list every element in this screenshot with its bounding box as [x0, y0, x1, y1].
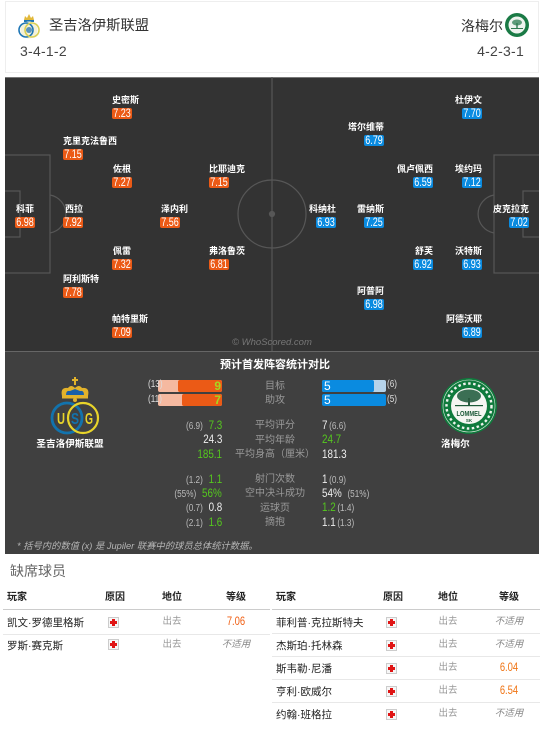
home assists bar	[158, 394, 222, 406]
player: 佩卢佩西	[397, 164, 433, 189]
row: 罗斯·赛克斯: 罗斯·赛克斯	[7, 640, 63, 652]
player: 雷纳斯: 7.25	[365, 215, 383, 229]
player: 西拉: 西拉	[65, 204, 83, 214]
label: goals: 目标	[265, 381, 285, 392]
label: tackles: 摘抱	[265, 517, 285, 528]
player: 西拉: 7.92	[64, 215, 82, 229]
icon: away team crest	[505, 13, 529, 37]
icon: USG crest: S	[71, 411, 79, 428]
row: 亨利·欧威尔	[272, 680, 540, 703]
away assists season value: (5)	[387, 394, 397, 405]
player: 佐根: 7.27	[113, 175, 131, 189]
away team name: 洛梅尔	[461, 18, 503, 34]
player: 克里克法鲁西	[63, 136, 117, 161]
home height: 185.1	[197, 447, 222, 461]
row: 菲利普·克拉斯特夫: 菲利普·克拉斯特夫	[276, 617, 364, 629]
player: 皮克拉克: 7.02	[510, 215, 528, 229]
player: 皮克拉克	[493, 204, 529, 229]
player: 佩卢佩西: 6.59	[414, 175, 432, 189]
player: 埃约玛: 7.12	[463, 175, 481, 189]
table header: 原因	[383, 592, 403, 603]
label: shots: 射门次数	[255, 474, 295, 485]
away assists bar	[322, 394, 386, 406]
pitch markings	[5, 77, 539, 351]
row: 斯韦勒·尼潘: 斯韦勒·尼潘	[276, 663, 332, 675]
label: average rating: 平均评分	[255, 420, 295, 431]
row: 亨利·欧威尔: 6.54	[500, 685, 518, 697]
table header: 地位	[162, 592, 182, 603]
player: 阿利斯特: 7.78	[64, 285, 82, 299]
player: 杜伊文	[455, 94, 482, 120]
panel: lineup statistics comparison	[5, 351, 539, 554]
icon: USG crest: U	[57, 411, 65, 428]
player: 杜伊文: 杜伊文	[455, 95, 482, 105]
player: 雷纳斯	[357, 204, 384, 229]
table header: 地位	[438, 592, 458, 603]
away goals season value: (6)	[387, 379, 397, 390]
player: 西拉	[63, 204, 83, 229]
away goals bar: 5	[324, 379, 331, 393]
row: 凯文·罗德里格斯	[3, 610, 270, 635]
home tackles: (2.1) 1.6	[186, 515, 222, 529]
away tackles: 1.1(1.3)	[322, 515, 354, 529]
player: 沃特斯: 沃特斯	[455, 246, 482, 256]
player: 塔尔维蒂: 塔尔维蒂	[348, 122, 384, 132]
home team name: 圣吉洛伊斯联盟	[49, 18, 149, 34]
row: 罗斯·赛克斯: 不适用	[222, 639, 250, 650]
table header	[272, 590, 540, 610]
away rating: 7(6.6)	[322, 418, 346, 432]
home shots: (1.2) 1.1	[186, 472, 222, 486]
player: 佐根	[112, 164, 132, 189]
table header: 等级	[499, 592, 519, 603]
row: 罗斯·赛克斯	[7, 638, 251, 652]
player: 克里克法鲁西: 克里克法鲁西	[63, 136, 117, 146]
home goals bar: 9	[214, 379, 221, 393]
away age: 24.7	[322, 432, 341, 446]
icon: USG crest: G	[85, 411, 93, 428]
row: 菲利普·克拉斯特夫	[272, 610, 540, 634]
row: 约翰·班格拉	[272, 703, 540, 725]
player: 弗洛鲁茨: 6.81	[210, 257, 228, 271]
player: 雷纳斯: 雷纳斯	[357, 204, 384, 214]
player: 比耶迪克: 7.15	[210, 175, 228, 189]
away team label: 洛梅尔	[441, 439, 470, 450]
player: 科菲: 6.98	[16, 215, 34, 229]
player: 阿利斯特: 阿利斯特	[63, 274, 99, 284]
player: 弗洛鲁茨: 弗洛鲁茨	[209, 246, 245, 256]
away height: 181.3	[322, 447, 347, 461]
player: 塔尔维蒂	[348, 122, 384, 147]
player: 埃约玛: 埃约玛	[455, 164, 482, 174]
player: 佩雷: 7.32	[113, 257, 131, 271]
away shots: 1(0.9)	[322, 472, 346, 486]
player: 埃约玛	[455, 164, 482, 189]
player: 弗洛鲁茨	[209, 246, 245, 271]
icon: home team crest	[18, 14, 40, 38]
player: 阿普阿	[357, 286, 384, 311]
player: 比耶迪克: 比耶迪克	[209, 164, 245, 174]
panel: match header	[5, 1, 539, 73]
player: 科纳杜	[309, 204, 336, 229]
row: 亨利·欧威尔: 出去	[438, 685, 458, 696]
table header: 玩家	[7, 592, 27, 603]
away dribbles: 1.2(1.4)	[322, 500, 354, 514]
player: 泽内利	[160, 204, 188, 229]
table header: 玩家	[276, 592, 296, 603]
table header: 等级	[226, 592, 246, 603]
row: 斯韦勒·尼潘: 出去	[438, 662, 458, 673]
player: 帕特里斯: 帕特里斯	[112, 314, 148, 324]
table: home missing players	[3, 590, 270, 652]
heading: missing players: 缺席球员	[10, 563, 66, 579]
player: 科纳杜: 6.93	[317, 215, 335, 229]
home goals bar	[158, 380, 222, 392]
away aerial: 54% (51%)	[322, 486, 369, 500]
player: 沃特斯: 6.93	[463, 257, 481, 271]
row: 约翰·班格拉: 出去	[438, 708, 458, 719]
player: 阿德沃耶	[446, 314, 482, 339]
home assists bar: 7	[214, 393, 221, 407]
row: 杰斯珀·托林森: 出去	[438, 639, 458, 650]
label: assists: 助攻	[265, 395, 285, 406]
player: 佩卢佩西: 佩卢佩西	[397, 164, 433, 174]
player: 克里克法鲁西: 7.15	[64, 147, 82, 161]
player: 史密斯	[112, 95, 139, 120]
player: 科菲	[15, 204, 35, 229]
label: aerial duels: 空中决斗成功	[245, 488, 305, 499]
player: 舒芙: 6.92	[414, 257, 432, 271]
player: 帕特里斯: 7.09	[113, 325, 131, 339]
player: 泽内利: 泽内利	[161, 204, 188, 214]
icon: Lommel crest	[441, 378, 497, 434]
row: 凯文·罗德里格斯: 凯文·罗德里格斯	[7, 617, 84, 629]
player: 舒芙	[413, 246, 433, 271]
player: 杜伊文: 7.70	[463, 106, 481, 120]
label: average height: 平均身高（厘米）	[235, 449, 315, 460]
away formation: 4-2-3-1	[477, 43, 524, 59]
home team label: 圣吉洛伊斯联盟	[36, 439, 104, 450]
away assists bar: 5	[324, 393, 331, 407]
player: 阿普阿: 阿普阿	[357, 286, 384, 296]
player: 阿利斯特	[63, 274, 99, 299]
row: 斯韦勒·尼潘: 6.04	[500, 662, 518, 674]
home goals season value: (13)	[148, 379, 163, 390]
player: 帕特里斯	[112, 314, 148, 339]
icon: Lommel crest: SK	[466, 418, 473, 423]
row: 约翰·班格拉: 不适用	[495, 708, 523, 719]
home aerial: (55%) 56%	[175, 486, 222, 500]
home age: 24.3	[203, 432, 222, 446]
home dribbles: (0.7) 0.8	[186, 500, 222, 514]
row: 杰斯珀·托林森: 不适用	[495, 639, 523, 650]
player: 佩雷: 佩雷	[113, 246, 131, 256]
table: away missing players	[272, 590, 540, 721]
table header	[3, 590, 270, 610]
player: 史密斯: 史密斯	[112, 95, 139, 105]
watermark: © WhoScored.com	[232, 337, 312, 348]
footnote: * 括号内的数值 (x) 是 Jupiler 联赛中的球员总体统计数据。	[17, 541, 258, 551]
home formation: 3-4-1-2	[20, 43, 67, 59]
player: 比耶迪克	[209, 164, 245, 189]
player: 史密斯: 7.23	[113, 106, 131, 120]
player: 阿德沃耶: 阿德沃耶	[446, 314, 482, 324]
row: 凯文·罗德里格斯: 出去	[162, 616, 182, 627]
row: 凯文·罗德里格斯: 7.06	[227, 616, 245, 628]
stats title: 预计首发阵容统计对比	[220, 359, 330, 371]
player: 舒芙: 舒芙	[415, 246, 433, 256]
row: 杰斯珀·托林森: 杰斯珀·托林森	[276, 640, 342, 652]
row: 菲利普·克拉斯特夫: 出去	[438, 616, 458, 627]
player: 科纳杜: 科纳杜	[309, 204, 336, 214]
table header: 原因	[105, 592, 125, 603]
away goals bar	[322, 380, 386, 392]
player: 沃特斯	[455, 246, 482, 271]
icon: Lommel crest: LOMMEL	[456, 409, 482, 418]
player: 皮克拉克: 皮克拉克	[493, 204, 529, 214]
row: 罗斯·赛克斯: 出去	[162, 639, 182, 650]
label: average age: 平均年龄	[255, 435, 295, 446]
home assists season value: (11)	[148, 394, 162, 405]
player: 塔尔维蒂: 6.79	[365, 133, 383, 147]
player: 泽内利: 7.56	[161, 215, 179, 229]
home rating values: (6.9) 7.3	[186, 418, 222, 432]
label: dribbles: 运球页	[260, 503, 290, 514]
icon: USG crest	[50, 377, 100, 434]
row: 斯韦勒·尼潘	[272, 657, 540, 680]
player: 阿德沃耶: 6.89	[463, 325, 481, 339]
row: 菲利普·克拉斯特夫: 不适用	[495, 616, 523, 627]
row: 亨利·欧威尔: 亨利·欧威尔	[276, 686, 332, 698]
player: 佩雷	[112, 246, 132, 271]
player: 科菲: 科菲	[16, 204, 34, 214]
player: 佐根: 佐根	[113, 164, 131, 174]
panel: pitch lineups	[5, 77, 539, 351]
row: 杰斯珀·托林森	[272, 634, 540, 657]
row: 约翰·班格拉: 约翰·班格拉	[276, 709, 332, 721]
player: 阿普阿: 6.98	[365, 297, 383, 311]
